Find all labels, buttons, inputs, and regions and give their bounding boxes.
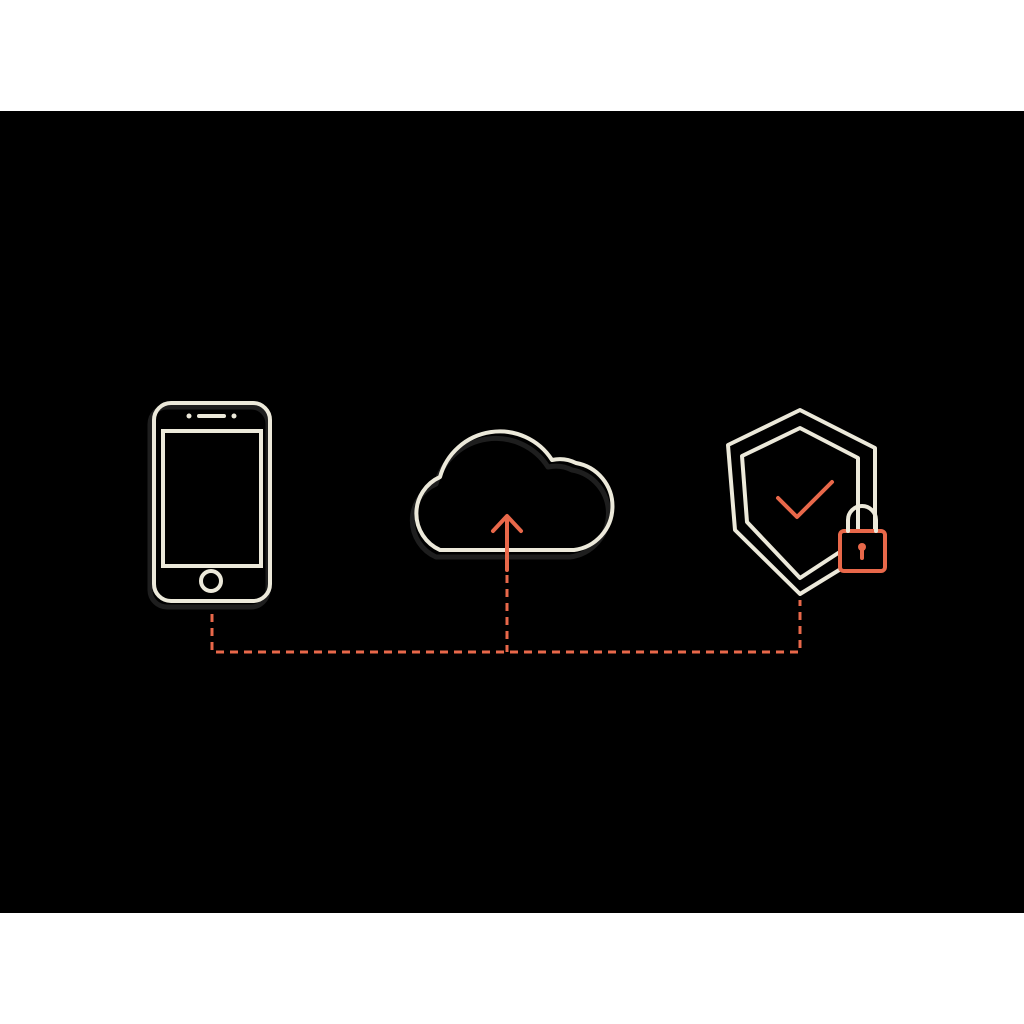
- icon: cloud with upload arrow: [412, 431, 612, 570]
- icon: shield with check and lock: [728, 410, 885, 594]
- panel: dark background: [0, 111, 1024, 913]
- arrow: dashed connector line: [212, 575, 800, 652]
- icon: smartphone: [150, 403, 270, 607]
